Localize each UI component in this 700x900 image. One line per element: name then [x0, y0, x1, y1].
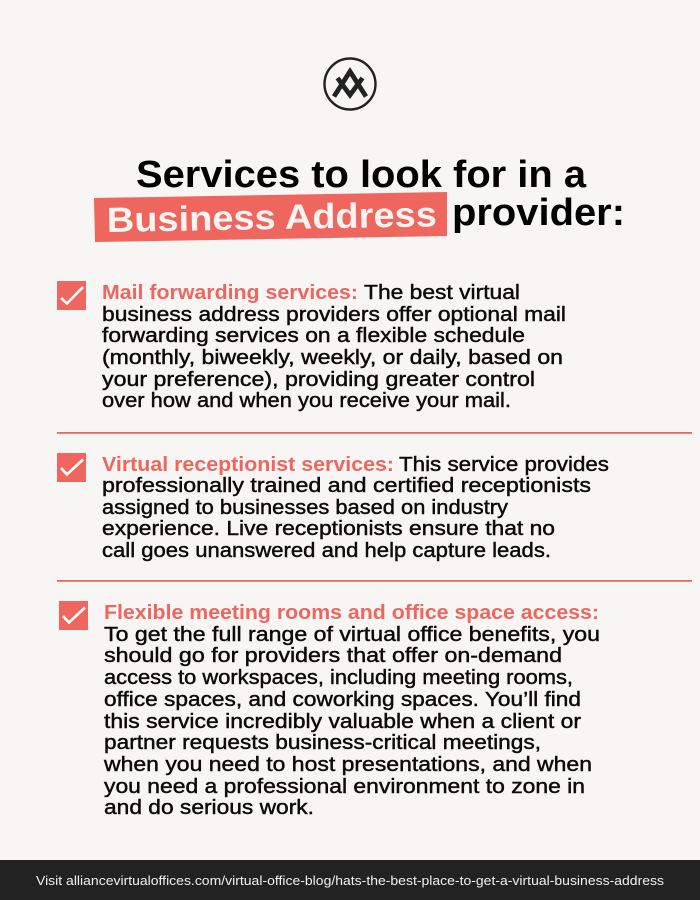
panel: mail forwarding: business address providers offer optional mail: [102, 303, 566, 326]
panel: flexible meeting rooms: To get the full range of virtual office benefits, you: [104, 623, 600, 646]
title: provider:: [452, 192, 625, 234]
panel: virtual receptionist: professionally trained and certified receptionists: [102, 474, 591, 497]
panel: mail forwarding: forwarding services on a flexible schedule: [102, 324, 525, 347]
panel: virtual receptionist: [57, 453, 609, 562]
panel: mail forwarding: The best virtual: [364, 281, 520, 304]
panel: virtual receptionist: This service provides: [399, 453, 609, 476]
panel: mail forwarding: over how and when you receive your mail.: [102, 389, 511, 412]
panel: virtual receptionist: Virtual receptionist services:: [102, 453, 394, 476]
title: Services to look for in a: [136, 154, 587, 196]
panel: virtual receptionist: experience. Live receptionists ensure that no: [102, 517, 555, 540]
panel: flexible meeting rooms: [59, 601, 600, 819]
panel: flexible meeting rooms: Flexible meeting rooms and office space access:: [104, 601, 599, 624]
panel: flexible meeting rooms: partner requests business-critical meetings,: [104, 731, 541, 754]
panel: flexible meeting rooms: when you need to host presentations, and when: [103, 753, 592, 776]
panel: mail forwarding: Mail forwarding services:: [102, 281, 358, 304]
icon: checkbox: [57, 453, 86, 482]
footer bar: [0, 860, 700, 900]
panel: flexible meeting rooms: should go for providers that offer on-demand: [104, 644, 562, 667]
panel: flexible meeting rooms: and do serious work.: [104, 796, 314, 819]
panel: flexible meeting rooms: you need a professional environment to zone in: [104, 775, 585, 798]
panel: mail forwarding: your preference), providing greater control: [102, 368, 535, 391]
panel: virtual receptionist: assigned to businesses based on industry: [102, 496, 509, 519]
icon: checkbox: [59, 601, 88, 630]
panel: flexible meeting rooms: this service incredibly valuable when a client or: [104, 710, 581, 733]
panel: mail forwarding: [57, 281, 566, 412]
logo: [324, 58, 376, 110]
panel: mail forwarding: (monthly, biweekly, weekly, or daily, based on: [102, 346, 563, 369]
footer bar: Visit alliancevirtualoffices.com/virtual-office-blog/hats-the-best-place-to-get-a-virtual-business-address: [36, 873, 665, 888]
title highlight: Business Address: [106, 195, 437, 240]
panel: virtual receptionist: call goes unanswered and help capture leads.: [102, 539, 551, 562]
icon: checkbox: [57, 281, 86, 310]
title: [94, 154, 625, 242]
panel: flexible meeting rooms: access to workspaces, including meeting rooms,: [104, 666, 573, 689]
panel: flexible meeting rooms: office spaces, and coworking spaces. You’ll find: [104, 688, 581, 711]
